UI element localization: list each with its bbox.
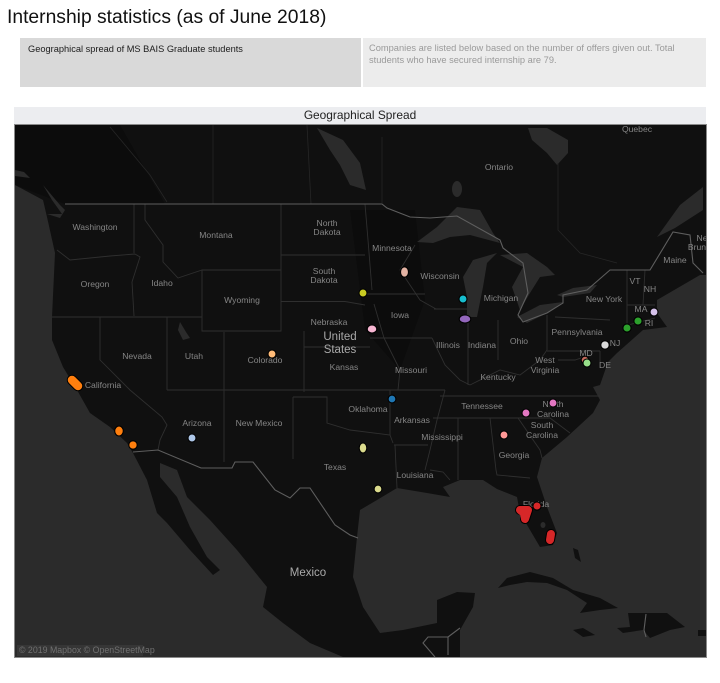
- map labels: Idaho: [151, 278, 173, 288]
- map labels: [72, 124, 708, 579]
- point: South Dakota: [359, 289, 367, 297]
- map: geographical spread: [14, 124, 707, 658]
- map labels: Montana: [199, 230, 233, 240]
- map labels: Mexico: [290, 567, 326, 579]
- map labels: United: [323, 331, 357, 343]
- map labels: Nevada: [122, 351, 152, 361]
- map labels: Kentucky: [480, 372, 516, 382]
- islands: Cuba, Hispaniola, Jamaica, Bahamas: [498, 548, 706, 638]
- point: Oklahoma: [388, 395, 396, 403]
- map labels: Missouri: [395, 365, 427, 375]
- panel text: total students note: Companies are listed below based on the number of offers given out. Total: [369, 43, 675, 53]
- international borders: [65, 204, 703, 657]
- canadian province lines: [110, 125, 617, 263]
- map labels: Oklahoma: [348, 404, 388, 414]
- panel: companies note: [363, 38, 706, 87]
- points: Maryland: [581, 356, 591, 367]
- map labels: Ohio: [510, 336, 528, 346]
- points: North Carolina: [522, 399, 557, 417]
- map labels: New Mexico: [236, 418, 283, 428]
- point: Minnesota: [400, 267, 408, 277]
- data points: internship locations: [72, 267, 658, 540]
- map labels: South: [313, 266, 335, 276]
- map labels: Carolina: [526, 430, 558, 440]
- land mass: [15, 125, 706, 657]
- map labels: Illinois: [436, 340, 460, 350]
- lakes and water bodies: [15, 128, 703, 528]
- point: Colorado: [268, 350, 276, 358]
- map labels: South: [531, 420, 553, 430]
- map labels: Iowa: [391, 310, 409, 320]
- map labels: Florida: [523, 499, 549, 509]
- map labels: Minnesota: [372, 243, 412, 253]
- map heading: Geographical Spread: [304, 108, 416, 122]
- map labels: MD: [579, 348, 593, 358]
- map labels: Arizona: [182, 418, 212, 428]
- panel text: total students note: students who have secured internship are 79.: [369, 55, 557, 65]
- title: Internship statistics (as of June 2018): [7, 7, 326, 28]
- point: Chicago: [459, 315, 471, 323]
- map labels: Ontario: [485, 162, 513, 172]
- point: Arizona: [188, 434, 196, 442]
- map labels: Washington: [72, 222, 118, 232]
- darker terrain: [15, 125, 425, 370]
- point: Boston: [650, 308, 658, 316]
- map labels: DE: [599, 360, 611, 370]
- map labels: Dakota: [310, 275, 338, 285]
- map labels: Michigan: [484, 293, 518, 303]
- map labels: Indiana: [468, 340, 496, 350]
- map labels: Dakota: [313, 227, 341, 237]
- map labels: Virginia: [531, 365, 559, 375]
- map labels: Kansas: [330, 362, 358, 372]
- map labels: California: [85, 380, 121, 390]
- point: Atlanta: [500, 431, 508, 439]
- map labels: Mississippi: [421, 432, 463, 442]
- points: Connecticut: [623, 317, 642, 332]
- map labels: Louisiana: [397, 470, 434, 480]
- map labels: Wyoming: [224, 295, 260, 305]
- map labels: Maine: [663, 255, 687, 265]
- map labels: Nebraska: [311, 317, 348, 327]
- panel: geographical spread description: [20, 38, 361, 87]
- points: Florida: [520, 502, 551, 540]
- map labels: States: [324, 344, 357, 356]
- map labels: Colorado: [248, 355, 283, 365]
- point: New Jersey: [601, 341, 609, 349]
- map labels: Carolina: [537, 409, 569, 419]
- map labels: Utah: [185, 351, 203, 361]
- panel text: subtitle: Geographical spread of MS BAIS Graduate students: [28, 44, 243, 54]
- map labels: MA: [635, 304, 648, 314]
- panel text: total students note: [369, 43, 675, 65]
- map labels: Brun: [688, 242, 706, 252]
- map labels: North: [316, 218, 338, 228]
- map labels: West: [535, 355, 555, 365]
- map labels: Oregon: [81, 279, 110, 289]
- map labels: NJ: [610, 338, 620, 348]
- map labels: NH: [644, 284, 656, 294]
- map labels: Arkansas: [394, 415, 430, 425]
- map labels: Georgia: [499, 450, 530, 460]
- map labels: Wisconsin: [420, 271, 460, 281]
- map labels: Texas: [324, 462, 346, 472]
- state borders: [52, 204, 655, 488]
- map labels: Pennsylvania: [551, 327, 603, 337]
- map labels: RI: [645, 318, 653, 328]
- points: Texas: [359, 443, 382, 493]
- point: Wisconsin: [459, 295, 467, 303]
- map attribution: © 2019 Mapbox © OpenStreetMap: [19, 645, 155, 655]
- map heading: [14, 107, 706, 124]
- points: California: [72, 380, 137, 449]
- map labels: VT: [630, 276, 641, 286]
- point: Nebraska: [367, 325, 377, 333]
- map labels: New York: [586, 294, 623, 304]
- map labels: Tennessee: [461, 401, 503, 411]
- map labels: North: [542, 399, 564, 409]
- map labels: Quebec: [622, 124, 653, 134]
